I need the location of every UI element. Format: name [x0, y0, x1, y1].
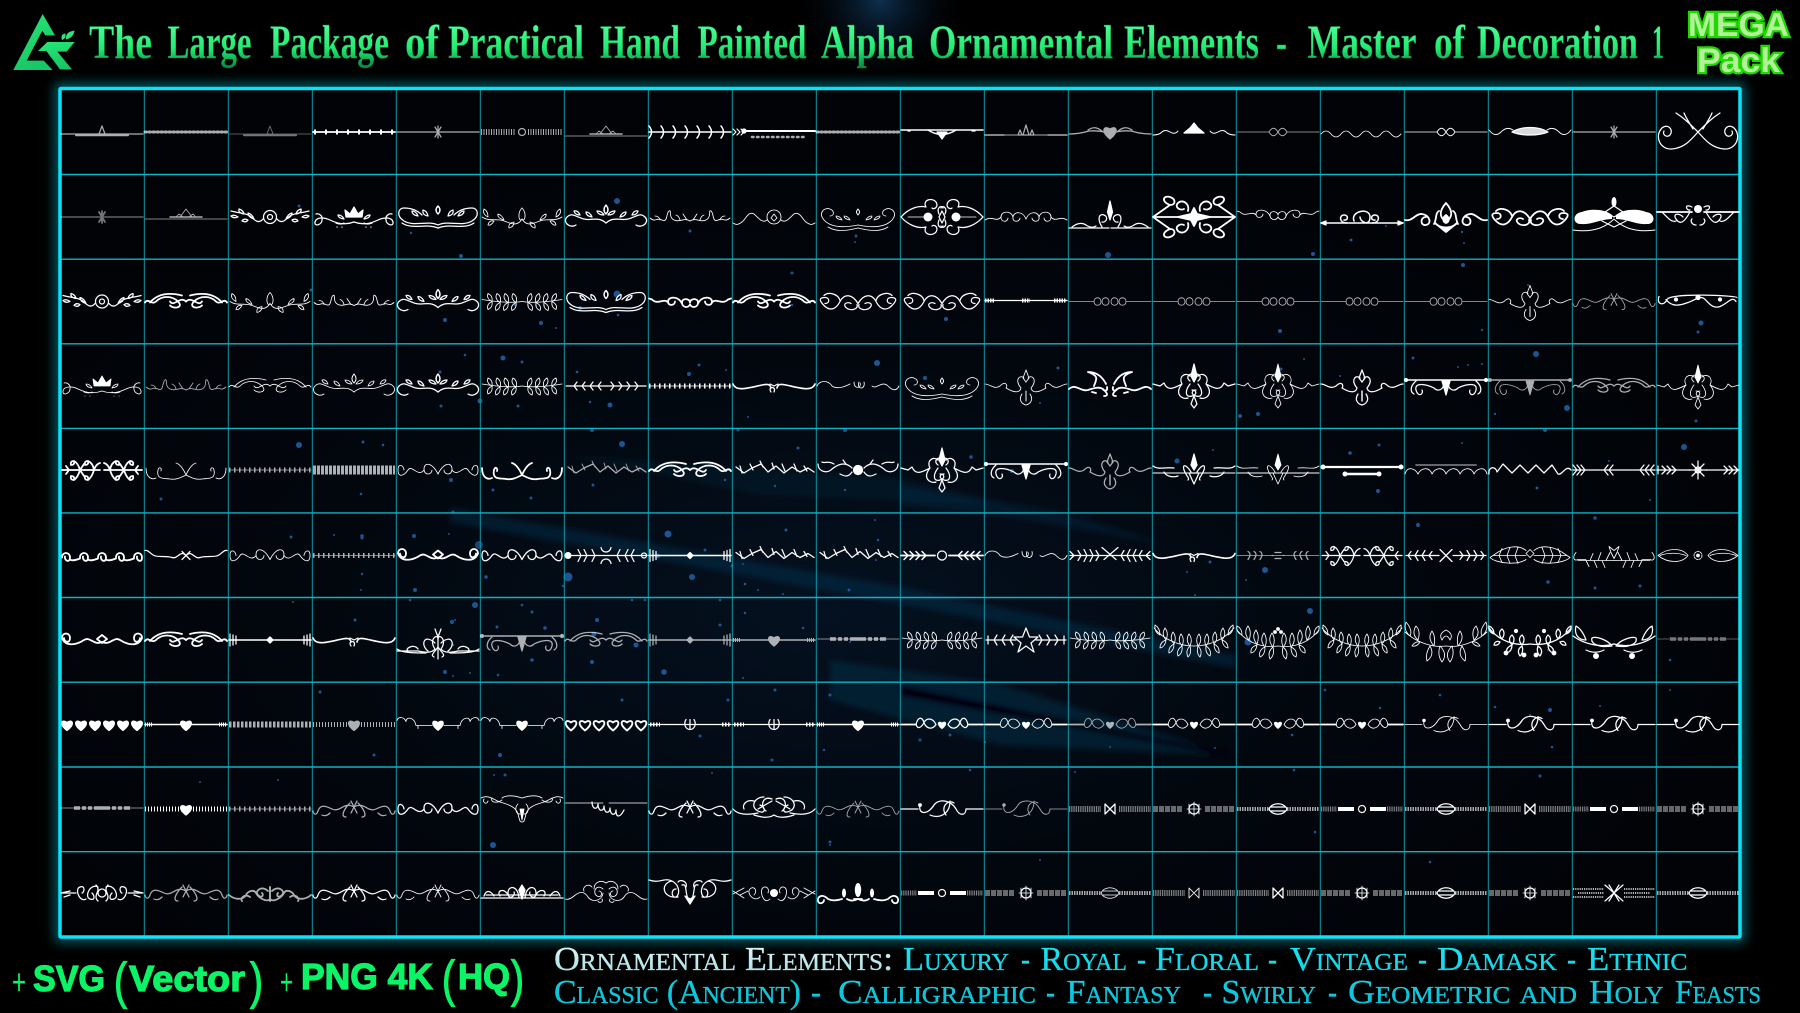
grid border: [60, 88, 1740, 937]
format labels: +: [280, 961, 293, 1002]
element categories text: Floral: [1155, 941, 1259, 978]
element categories text: -: [1021, 941, 1030, 978]
element categories text: Geometric and: [1348, 974, 1577, 1011]
element categories text: -: [1268, 941, 1277, 978]
format labels: (: [114, 953, 127, 1009]
element categories text: -: [1418, 941, 1427, 978]
element categories text: Holy: [1589, 974, 1664, 1011]
title: The: [89, 16, 152, 69]
bokeh particles: [160, 198, 1704, 863]
title: Package: [270, 16, 389, 69]
element categories text: -: [1328, 974, 1337, 1011]
format labels: ): [250, 953, 263, 1009]
element categories text: -: [1567, 941, 1576, 978]
element categories text: Vintage: [1290, 941, 1408, 978]
format labels: SVG: [33, 958, 105, 999]
format labels: HQ: [458, 956, 510, 997]
ornament grid: [61, 113, 1739, 904]
format labels: ): [511, 951, 524, 1007]
mega pack badge: [1688, 6, 1789, 80]
element categories text: Calligraphic: [838, 974, 1036, 1011]
light streaks: [450, 455, 1235, 758]
title: Painted: [698, 16, 807, 69]
element categories text: Swirly: [1222, 974, 1316, 1011]
format labels: [12, 951, 524, 1009]
element categories text: Fantasy: [1066, 974, 1181, 1011]
title: [89, 16, 1664, 69]
ornament row 8: [62, 716, 1739, 732]
ornament row 5: [62, 448, 1739, 492]
element categories text: Luxury: [903, 941, 1009, 978]
ornament row 4: [63, 364, 1739, 409]
element categories text: -: [1137, 941, 1146, 978]
title: Large: [168, 16, 252, 69]
element categories text: Royal: [1040, 941, 1127, 978]
element categories text: -: [1203, 974, 1212, 1011]
mega pack badge: MEGA: [1688, 6, 1789, 43]
element categories text: Damask: [1437, 941, 1558, 978]
ornament row 2: [61, 197, 1739, 237]
format labels: (: [442, 951, 455, 1007]
element categories text: Ethnic: [1587, 941, 1688, 978]
element categories text: Classic (Ancient): [554, 974, 801, 1011]
ornament row 9: [61, 796, 1739, 822]
element categories text: -: [1046, 974, 1055, 1011]
title: Ornamental: [929, 16, 1113, 69]
title: 1: [1652, 16, 1664, 69]
ornament row 6: [62, 546, 1738, 568]
title: Elements: [1124, 16, 1259, 69]
title: Hand: [600, 16, 680, 69]
title: Decoration: [1477, 16, 1638, 69]
title: of: [1434, 16, 1466, 69]
format labels: Vector: [129, 958, 245, 999]
element categories text: Feasts: [1675, 974, 1761, 1011]
top glow: [790, 0, 970, 90]
format labels: +: [12, 961, 26, 1002]
grid lines: [60, 88, 1740, 937]
ornament row 7: [62, 622, 1739, 662]
title: Master: [1308, 16, 1416, 69]
ornament row 10: [61, 880, 1739, 904]
title: Practical: [448, 16, 584, 69]
ornament row 1: [61, 113, 1738, 149]
ornament row 3: [63, 286, 1737, 320]
title: of: [405, 16, 440, 69]
grid background: [60, 88, 1740, 937]
element categories text: [554, 941, 1761, 1011]
mega pack badge: Pack: [1697, 42, 1780, 80]
element categories text: -: [811, 974, 821, 1011]
format labels: PNG 4K: [301, 956, 433, 997]
element categories text: Ornamental Elements:: [554, 941, 893, 978]
grid glow: [60, 88, 1740, 937]
title: Alpha: [821, 16, 914, 69]
title: -: [1276, 16, 1287, 69]
logo: [13, 14, 75, 70]
